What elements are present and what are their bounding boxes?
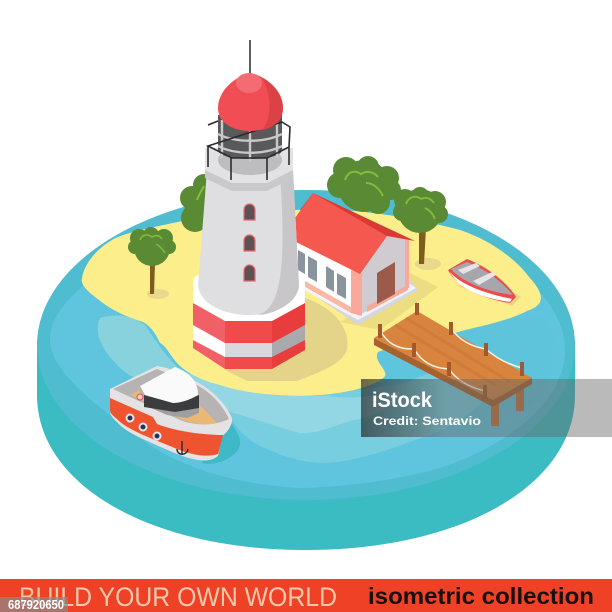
lighthouse — [193, 40, 305, 369]
boat interior — [451, 262, 513, 295]
boat seats — [458, 263, 496, 285]
foundation top — [297, 280, 416, 320]
watermark logo — [372, 389, 481, 428]
tree shadow — [147, 289, 169, 299]
octagonal base top — [193, 266, 305, 322]
red hull band — [110, 398, 223, 456]
foliage — [180, 174, 215, 232]
pier legs — [491, 385, 524, 426]
tree: large behind house — [327, 156, 401, 214]
dome — [218, 73, 283, 131]
tree: right of house — [393, 187, 448, 270]
dome cap — [236, 73, 262, 93]
wooden pier — [374, 303, 532, 426]
pier side face — [374, 338, 532, 407]
base red right face — [272, 303, 305, 369]
boat wake shadow — [202, 418, 240, 464]
antenna — [249, 40, 251, 76]
image id patch — [0, 597, 68, 612]
foliage — [327, 156, 401, 214]
trunk — [150, 262, 155, 294]
trunk — [419, 228, 426, 264]
roof ridge side — [300, 193, 415, 241]
iStock wordmark: iStock — [372, 389, 432, 412]
deck interior — [113, 369, 229, 424]
leaf highlights — [406, 197, 435, 219]
lighthouse ground shadow — [225, 298, 347, 381]
disc side wall — [37, 340, 575, 550]
hull — [110, 366, 232, 461]
base white stripe left — [193, 325, 225, 357]
mooring ropes — [380, 328, 522, 391]
door — [377, 262, 395, 304]
house ground shadow — [340, 273, 438, 330]
life ring — [137, 394, 143, 400]
credit line: Credit: Sentavio — [373, 416, 481, 428]
tree: left on sand — [128, 227, 176, 299]
sand beach — [82, 208, 541, 396]
cabin lower wall — [144, 405, 199, 418]
foliage — [128, 227, 176, 266]
side wall — [296, 238, 356, 316]
hull white strip — [450, 272, 512, 302]
rowing boat — [448, 259, 521, 306]
hull — [448, 259, 516, 303]
leaf highlight — [197, 186, 204, 200]
gallery railing — [208, 121, 290, 180]
water near pier — [430, 316, 554, 425]
image id: 687920650 — [8, 598, 64, 612]
base red front face — [225, 321, 272, 369]
lantern base — [218, 145, 282, 175]
cabin windows — [144, 395, 199, 412]
footer collection label: isometric collection — [368, 583, 594, 609]
watermark dark fade — [361, 379, 446, 437]
foundation slab — [297, 280, 418, 325]
pink wall trim — [305, 281, 351, 313]
island disc — [37, 190, 575, 550]
tower body — [198, 170, 299, 315]
pier deck — [374, 311, 532, 400]
roof slope — [295, 193, 387, 274]
pink corner trims — [351, 240, 409, 316]
portholes — [126, 414, 160, 440]
leaf highlights — [140, 235, 165, 253]
boathouse — [295, 193, 418, 325]
footer heading: BUILD YOUR OWN WORLD — [19, 582, 337, 612]
leaf highlights — [345, 172, 383, 196]
lantern frame — [218, 120, 282, 162]
deck planks — [395, 318, 510, 385]
windows — [298, 250, 346, 299]
anchor — [177, 441, 188, 454]
tower windows — [244, 204, 255, 281]
base red left face — [193, 303, 225, 369]
gallery platform — [205, 148, 293, 191]
dome shaded side — [262, 78, 283, 130]
cabin roof — [140, 367, 198, 403]
tree behind lighthouse — [180, 174, 215, 232]
water surface — [37, 190, 575, 500]
foliage — [393, 187, 448, 233]
watermark band — [361, 379, 612, 437]
main water layer — [50, 225, 565, 488]
lantern room — [218, 115, 282, 159]
wooden deck rear — [131, 390, 146, 402]
base stripe front — [225, 343, 272, 357]
boat shadow — [455, 285, 521, 306]
gable wall — [358, 236, 408, 316]
tower shaded side — [258, 170, 299, 315]
palest water by sand lower — [178, 368, 400, 433]
tree shadow — [415, 258, 441, 270]
wooden deck — [175, 403, 217, 424]
motor yacht — [110, 366, 232, 461]
pale water by sand left — [98, 316, 178, 379]
base stripe right — [272, 325, 305, 357]
pale water band lower — [225, 335, 520, 463]
gallery platform rim — [205, 170, 293, 191]
pier posts — [378, 303, 524, 399]
footer bar — [0, 579, 612, 612]
